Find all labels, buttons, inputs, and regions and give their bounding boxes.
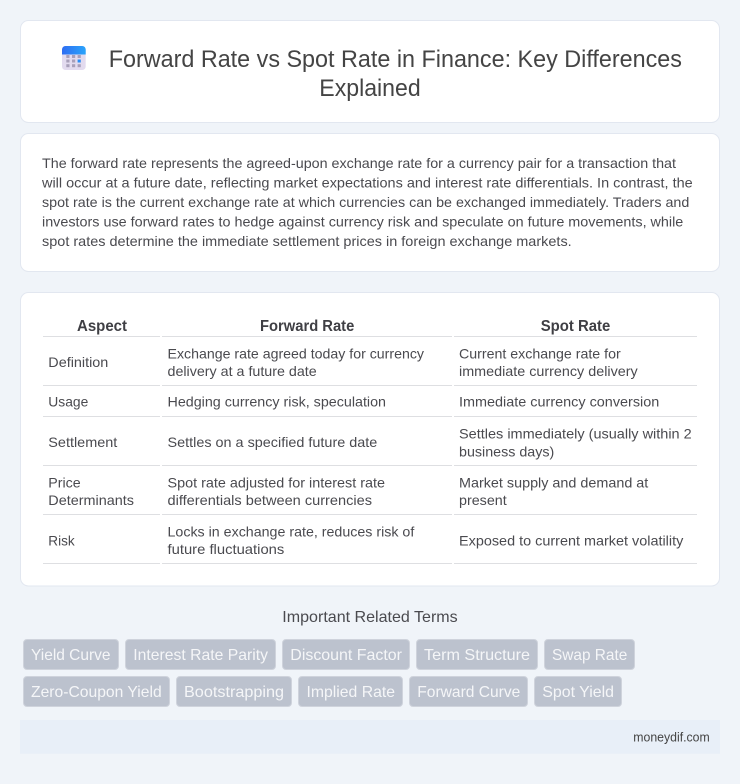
panel: header: [20, 20, 720, 122]
tag: Bootstrapping: Bootstrapping: [184, 684, 284, 701]
table row: definition: immediate currency delivery: [459, 363, 638, 379]
tag: Interest Rate Parity: [126, 640, 276, 670]
tag: Yield Curve: Yield Curve: [31, 647, 111, 664]
text block: summary: [41, 155, 693, 249]
table row: settlement: Settles immediately (usually within 2: [459, 425, 692, 441]
table row: definition: Definition: [48, 354, 108, 370]
tag: Interest Rate Parity: Interest Rate Parity: [133, 647, 268, 664]
tag: Spot Yield: Spot Yield: [542, 684, 614, 701]
tag: Swap Rate: [544, 640, 634, 670]
tag: Spot Yield: [534, 676, 622, 706]
table header: Forward Rate: [260, 318, 355, 335]
tag: Forward Curve: [410, 676, 528, 706]
table row: usage: Usage: [48, 394, 89, 410]
table row: risk: Risk: [48, 532, 76, 548]
related term tags: [24, 640, 634, 706]
table row: definition: Current exchange rate for: [459, 345, 621, 361]
table row: price determinants: differentials between currencies: [168, 492, 372, 508]
tag: Zero-Coupon Yield: Zero-Coupon Yield: [31, 684, 162, 701]
tag: Forward Curve: Forward Curve: [417, 684, 520, 701]
table row: risk: Exposed to current market volatility: [459, 532, 683, 548]
tag: Discount Factor: Discount Factor: [290, 647, 403, 664]
table row: usage: Hedging currency risk, speculation: [168, 394, 386, 410]
table row: risk: Locks in exchange rate, reduces risk of: [168, 523, 414, 539]
table header: Aspect: [77, 318, 127, 335]
text block: summary: spot rates determine the immediate settlement prices in foreign exchange markets.: [42, 233, 572, 249]
tag: Implied Rate: Implied Rate: [306, 684, 395, 701]
table row: definition: [48, 345, 638, 379]
table row: settlement: business days): [459, 444, 554, 460]
table row: price determinants: Price: [48, 474, 81, 490]
table row: settlement: Settlement: [48, 434, 117, 450]
table row: price determinants: Determinants: [48, 492, 134, 508]
tag: Zero-Coupon Yield: [24, 676, 170, 706]
tag: Term Structure: Term Structure: [424, 647, 530, 664]
table row: settlement: Settles on a specified future date: [168, 434, 378, 450]
table row: price determinants: Spot rate adjusted for interest rate: [168, 474, 385, 490]
tag: Swap Rate: Swap Rate: [552, 647, 627, 664]
heading: related terms: Important Related Terms: [282, 609, 458, 626]
tag: Term Structure: [416, 640, 538, 670]
title: Forward Rate vs Spot Rate in Finance: Key Differences: [109, 46, 682, 73]
table row: price determinants: Market supply and demand at: [459, 474, 648, 490]
text block: summary: will occur at a future date, reflecting market expectations and interest rate differentials. In contrast, the: [41, 174, 693, 190]
table row: risk: [48, 523, 683, 557]
text block: summary: spot rate is the current exchange rate at which currencies can be exchanged immediately. Traders and: [42, 194, 689, 210]
table row: usage: Immediate currency conversion: [459, 394, 659, 410]
panel: summary paragraph: [20, 134, 720, 272]
table header: Spot Rate: [541, 318, 611, 335]
title: Explained: [319, 75, 421, 102]
table row: definition: delivery at a future date: [168, 363, 317, 379]
tag: Bootstrapping: [176, 676, 292, 706]
table header: [77, 318, 611, 335]
icon: calendar: [62, 46, 86, 70]
table row: price determinants: present: [459, 492, 507, 508]
panel: comparison table: [20, 292, 720, 586]
footer source text: moneydif.com: [633, 729, 710, 744]
table row: risk: future fluctuations: [168, 541, 284, 557]
table row: usage: [48, 394, 659, 410]
footer: [20, 720, 720, 754]
table row: settlement: [48, 425, 692, 460]
table row: price determinants: [48, 474, 648, 508]
title: [109, 46, 682, 102]
tag: Discount Factor: [282, 640, 410, 670]
tag: Yield Curve: [24, 640, 118, 670]
tag: Implied Rate: [298, 676, 402, 706]
text block: summary: The forward rate represents the agreed-upon exchange rate for a currency pair for a transaction that: [42, 155, 676, 171]
table row: definition: Exchange rate agreed today for currency: [168, 345, 424, 361]
text block: summary: investors use forward rates to hedge against currency risk and speculate on future movements, while: [42, 213, 684, 229]
